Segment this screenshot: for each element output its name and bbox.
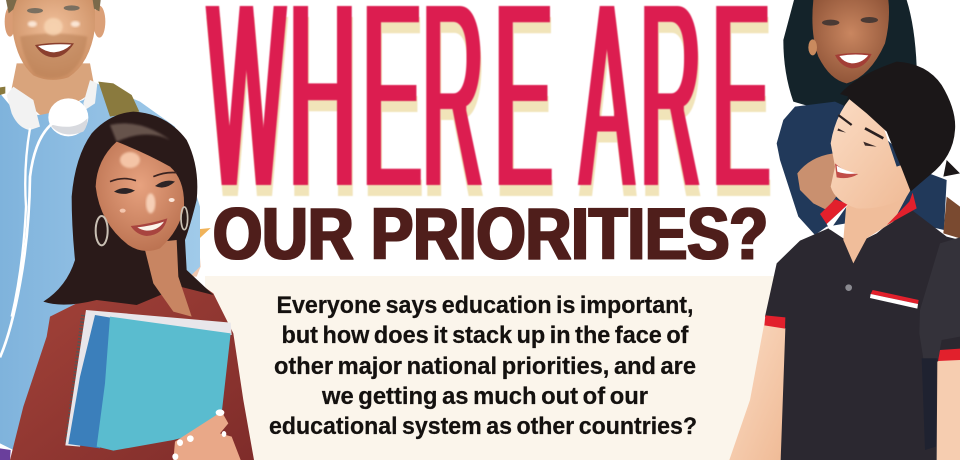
backpack strap [98, 82, 139, 117]
notebook pages [65, 310, 232, 447]
girl's shirt [777, 102, 947, 235]
hair tuft behind [943, 160, 960, 177]
title: where are [208, 0, 771, 256]
ear [902, 153, 930, 180]
title letters [208, 0, 770, 245]
man's hair [6, 0, 17, 13]
pencil [190, 228, 211, 247]
man's face [13, 0, 95, 80]
subtitle: our priorities: OUR PRIORITIES? [213, 194, 768, 275]
girl's ear [808, 39, 817, 55]
woman's hand [173, 412, 241, 460]
placket button [845, 284, 852, 291]
young man's face [831, 98, 917, 209]
headphone cables [0, 123, 53, 357]
man's eyes [27, 8, 43, 13]
earrings [96, 216, 108, 245]
illustration: young man in polo [729, 62, 960, 460]
man's arm [167, 197, 201, 277]
backpack strap [919, 237, 960, 358]
illustration: girl behind [777, 0, 960, 238]
intro paragraph: educational system as other countries? [269, 413, 697, 440]
girl's far arm [943, 197, 960, 238]
neck [843, 197, 907, 263]
collar [820, 199, 848, 224]
man's ears [5, 7, 15, 37]
notebook cover [97, 317, 231, 451]
woman's eyes [114, 188, 135, 194]
young man's hair [840, 62, 955, 192]
man's neck [12, 63, 95, 115]
polo shirt [765, 207, 960, 460]
intro paragraph: but how does it stack up in the face of [282, 322, 689, 349]
man's smile [35, 43, 74, 57]
fingernails [172, 409, 226, 460]
woman's smile [131, 218, 167, 236]
title shadow [209, 0, 771, 256]
man's nose and cheeks [44, 18, 63, 35]
eyes and brows [837, 128, 877, 147]
woman's hair [43, 112, 213, 305]
intro paragraph: we getting as much out of our [321, 383, 648, 410]
girl's arm [797, 153, 843, 210]
right arm [937, 358, 960, 460]
illustration: woman with notebook [10, 112, 254, 460]
forehead and cheek highlights [120, 152, 140, 168]
headphones [7, 87, 40, 130]
pocket stripe [871, 290, 919, 304]
girl's hair [783, 0, 917, 113]
sleeve cuffs [764, 315, 785, 329]
girl's smile [835, 53, 872, 68]
man's stubble [20, 33, 87, 78]
woman's face [96, 142, 184, 251]
girl's eyes [822, 20, 839, 26]
girl's face [812, 0, 889, 83]
man's shirt [0, 83, 200, 450]
woman's neck [143, 240, 192, 317]
illustration: man with headphones [0, 0, 211, 460]
notebook [65, 310, 232, 451]
woman's jacket [10, 270, 254, 460]
panel: intro background [205, 276, 785, 460]
intro paragraph: other major national priorities, and are [274, 353, 696, 380]
smile [835, 163, 858, 178]
notebook spine [68, 315, 115, 448]
notebook spiral [67, 315, 83, 443]
hair highlight [110, 123, 170, 142]
left arm [729, 325, 788, 460]
intro paragraph [269, 292, 697, 440]
purple trousers [0, 448, 11, 460]
intro paragraph: Everyone says education is important, [276, 292, 694, 319]
